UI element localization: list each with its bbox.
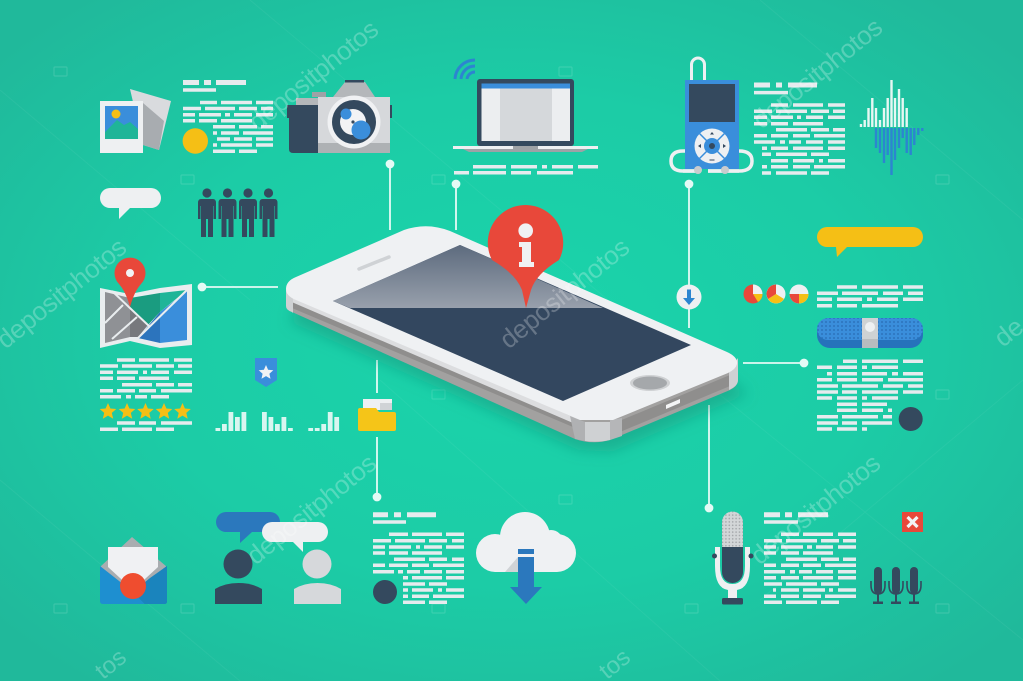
icon: folder bbox=[358, 399, 396, 431]
icon: laptop with wifi bbox=[453, 60, 598, 152]
icon: group of people bbox=[198, 188, 278, 237]
text block: under map bbox=[100, 360, 192, 429]
text block: right lower bbox=[817, 361, 923, 431]
text block: under laptop bbox=[454, 167, 598, 173]
connector lines bbox=[198, 160, 808, 512]
text block: top right bbox=[754, 85, 845, 173]
icon: map with location pin bbox=[100, 258, 192, 348]
icon: close button bbox=[902, 512, 923, 532]
icon: cloud download bbox=[476, 512, 576, 604]
text block: bottom right bbox=[764, 515, 856, 602]
text block: right upper bbox=[817, 287, 923, 306]
watermarks: depositphotos bbox=[243, 14, 384, 136]
icon: two people talking bbox=[215, 512, 341, 604]
icon: three small microphones bbox=[871, 567, 921, 604]
icon: camera bbox=[287, 80, 392, 153]
icon: media player with earphones bbox=[671, 58, 752, 174]
text block: top left bbox=[183, 82, 273, 154]
icon: badge with star bbox=[255, 358, 277, 387]
icon: yellow speech bubble bbox=[817, 227, 923, 257]
watermarks: depositphotos bbox=[241, 448, 382, 570]
icon: envelope bbox=[100, 537, 167, 604]
icon: five rating stars bbox=[100, 403, 191, 419]
icon: portable speaker bbox=[817, 318, 923, 348]
text block: bottom middle bbox=[373, 515, 464, 604]
icon: microphone bbox=[712, 512, 754, 604]
bar chart: small bars bbox=[216, 412, 339, 431]
pie charts bbox=[744, 284, 808, 304]
watermarks: depositphotos bbox=[494, 232, 635, 354]
icon: white speech bubble bbox=[100, 188, 161, 219]
icon: photos bbox=[100, 89, 171, 153]
watermarks: depositphotos bbox=[747, 12, 888, 134]
phone bbox=[286, 226, 748, 452]
icon: download badge bbox=[676, 284, 702, 310]
watermarks: depositphotos bbox=[745, 448, 886, 570]
icon: sound wave bbox=[861, 80, 922, 175]
icon: info pin bbox=[488, 205, 563, 308]
